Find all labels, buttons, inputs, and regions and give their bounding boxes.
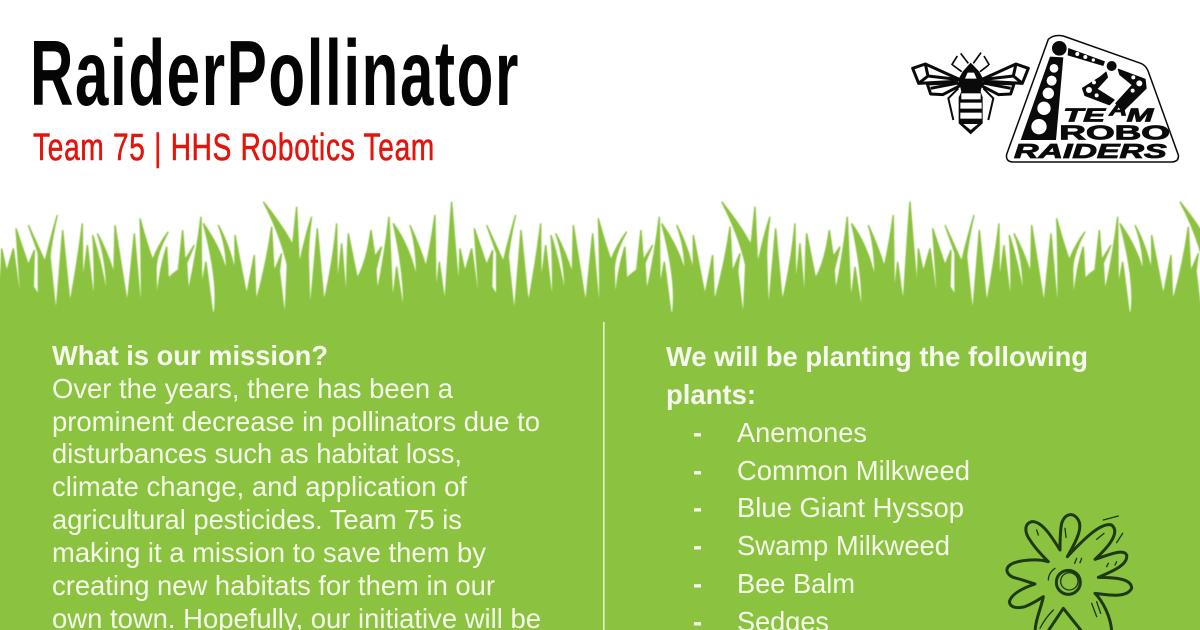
robot arm tower — [1021, 41, 1146, 140]
plant list items: Common Milkweed — [737, 455, 970, 486]
plants heading — [666, 341, 1088, 410]
mission heading: What is our mission? — [52, 340, 328, 371]
mission paragraph: climate change, and application of — [52, 471, 467, 502]
grass field — [0, 202, 1200, 630]
plant list items: - — [693, 417, 702, 448]
column divider — [603, 322, 605, 630]
mission paragraph: agricultural pesticides. Team 75 is — [52, 504, 462, 535]
plants heading: We will be planting the following — [666, 341, 1088, 372]
logo wordmark: TE — [1063, 105, 1106, 126]
mission paragraph: creating new habitats for them in our — [52, 570, 495, 601]
plant list items: - — [693, 530, 702, 561]
logo wordmark: ROBO — [1059, 122, 1170, 144]
icon: flower doodle — [1007, 515, 1132, 630]
plant list items: Blue Giant Hyssop — [737, 492, 964, 523]
logo wordmark — [1014, 98, 1170, 163]
panel: plants list — [666, 341, 1088, 630]
plant list items — [693, 417, 970, 630]
mission paragraph: making it a mission to save them by — [52, 537, 486, 568]
plant list items: - — [693, 568, 702, 599]
plant list items: - — [693, 455, 702, 486]
logo wordmark: A — [1108, 98, 1127, 119]
mission paragraph: prominent decrease in pollinators due to — [52, 406, 540, 437]
panel: mission text — [52, 340, 541, 630]
logo outline — [1006, 35, 1178, 162]
plant list items: Bee Balm — [737, 568, 855, 599]
mission paragraph — [52, 373, 541, 630]
title: RaiderPollinator — [30, 21, 520, 125]
logo wordmark: RAIDERS — [1014, 141, 1168, 163]
plants heading: plants: — [666, 379, 756, 410]
logo: Team Robo Raiders — [1006, 35, 1178, 163]
logo wordmark: M — [1127, 105, 1154, 126]
subtitle: Team 75 | HHS Robotics Team — [33, 127, 435, 169]
plant list items: Anemones — [737, 417, 867, 448]
icon: bee — [913, 53, 1028, 134]
plant list items: Swamp Milkweed — [737, 530, 950, 561]
plant list items: - — [693, 492, 702, 523]
mission paragraph: disturbances such as habitat loss, — [52, 438, 462, 469]
mission paragraph: Over the years, there has been a — [52, 373, 454, 404]
